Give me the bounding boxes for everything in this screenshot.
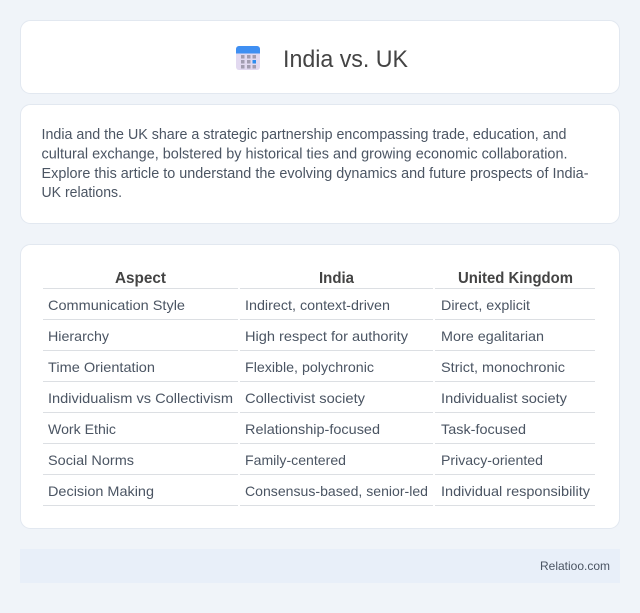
row: Individualism vs Collectivism xyxy=(48,390,567,406)
text block: introduction paragraph: Explore this article to understand the evolving dynamics and future prospects of India- xyxy=(42,166,589,182)
row: Individualism vs Collectivism: Collectivist society xyxy=(245,390,365,406)
row: Hierarchy: More egalitarian xyxy=(441,328,544,344)
row: Work Ethic: Relationship-focused xyxy=(245,421,380,437)
row: Social Norms xyxy=(48,452,543,468)
row: Communication Style: Communication Style xyxy=(48,297,185,313)
row: Hierarchy: Hierarchy xyxy=(48,328,109,344)
row: Social Norms: Family-centered xyxy=(245,452,346,468)
row: Decision Making: Consensus-based, senior-led xyxy=(245,483,428,499)
row: Communication Style xyxy=(48,297,530,313)
table header xyxy=(115,270,573,287)
row: Work Ethic: Work Ethic xyxy=(48,421,116,437)
text block: introduction paragraph: cultural exchange, bolstered by historical ties and growing economic collaboration. xyxy=(42,146,568,162)
panel: comparison table xyxy=(20,244,620,528)
row: Hierarchy xyxy=(48,328,544,344)
row: Communication Style: Direct, explicit xyxy=(441,297,530,313)
table header: Aspect xyxy=(115,270,167,287)
icon: calendar xyxy=(236,46,260,70)
row: Individualism vs Collectivism: Individualist society xyxy=(441,390,567,406)
panel: introduction xyxy=(20,104,620,224)
row: Decision Making xyxy=(48,483,590,499)
row: Time Orientation xyxy=(48,359,565,375)
row: Hierarchy: High respect for authority xyxy=(245,328,408,344)
row: Time Orientation: Time Orientation xyxy=(48,359,155,375)
row: Individualism vs Collectivism: Individualism vs Collectivism xyxy=(48,390,233,406)
row: Decision Making: Individual responsibility xyxy=(441,483,590,499)
panel: title card xyxy=(20,20,620,94)
text block: introduction paragraph xyxy=(42,127,589,201)
row: Social Norms: Privacy-oriented xyxy=(441,452,543,468)
row: Communication Style: Indirect, context-driven xyxy=(245,297,390,313)
row: Work Ethic xyxy=(48,421,526,437)
table header: India xyxy=(319,270,354,287)
text block: introduction paragraph: UK relations. xyxy=(42,185,122,201)
footer credit: Relatioo.com xyxy=(540,559,610,573)
footer xyxy=(20,549,620,583)
row: Work Ethic: Task-focused xyxy=(441,421,526,437)
row: Time Orientation: Strict, monochronic xyxy=(441,359,565,375)
row: Decision Making: Decision Making xyxy=(48,483,154,499)
table header: United Kingdom xyxy=(458,270,573,287)
text block: introduction paragraph: India and the UK share a strategic partnership encompassing trade, education, and xyxy=(42,127,566,143)
row: Time Orientation: Flexible, polychronic xyxy=(245,359,374,375)
title: India vs. UK xyxy=(283,46,408,73)
row: Social Norms: Social Norms xyxy=(48,452,134,468)
